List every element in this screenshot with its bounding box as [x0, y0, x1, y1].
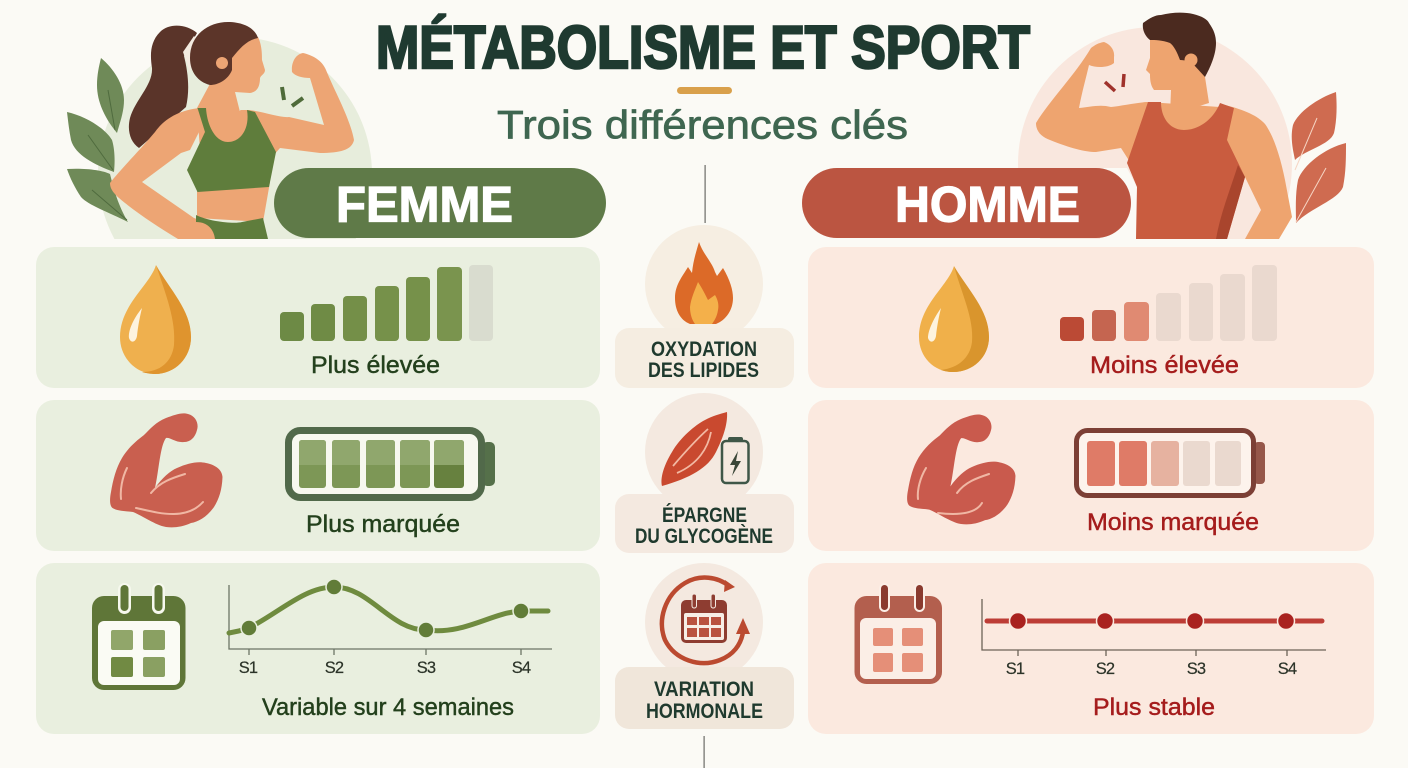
metric: oxydation des lipides: DES LIPIDES — [648, 359, 759, 382]
label: OXYDATION — [651, 338, 757, 361]
label: VARIATION — [654, 678, 754, 701]
man leaves — [1292, 92, 1346, 223]
header: femme: FEMME — [336, 176, 513, 232]
man tank shadow — [1216, 165, 1245, 239]
label: Moins élevée — [1090, 352, 1239, 379]
man ear — [1184, 54, 1198, 66]
subtitle: Trois différences clés — [497, 104, 908, 148]
woman background circle — [98, 39, 372, 239]
metric: epargne du glycogene — [615, 393, 794, 553]
woman hair tie — [183, 36, 196, 71]
woman shorts — [196, 215, 268, 239]
woman arm on hip — [110, 108, 215, 239]
icon: muscle — [110, 413, 222, 527]
header: homme — [802, 168, 1131, 238]
woman chest skin — [198, 111, 247, 144]
line chart: stable: S1 — [1006, 660, 1025, 678]
man hair — [1143, 13, 1216, 77]
title: MÉTABOLISME ET SPORT — [376, 14, 1030, 81]
icon: flame — [675, 242, 733, 324]
metric: variation hormonale — [615, 563, 794, 729]
illustration: woman flexing — [67, 22, 372, 239]
icon: cycle arrows — [662, 578, 750, 663]
bar gauge — [280, 265, 493, 341]
metric: variation hormonale: HORMONALE — [646, 700, 763, 723]
header: femme — [274, 168, 606, 238]
center divider top — [704, 165, 706, 223]
panel: homme hormones — [808, 563, 1374, 734]
line chart: stable: S4 — [1278, 660, 1297, 678]
icon: muscle — [907, 414, 1015, 524]
bar gauge — [1060, 265, 1277, 341]
panel: homme glycogene — [808, 400, 1374, 551]
label: Variable sur 4 semaines — [262, 694, 514, 721]
metric: epargne du glycogene: DU GLYCOGÈNE — [635, 525, 773, 548]
man chest skin — [1161, 102, 1218, 130]
line chart: variable — [229, 579, 552, 677]
line chart: stable: S2 — [1096, 660, 1115, 678]
panel: homme lipides — [808, 247, 1374, 388]
line chart: stable: S3 — [1187, 660, 1206, 678]
man flexed arm — [1036, 42, 1148, 160]
line chart: stable — [982, 599, 1326, 678]
header: homme: HOMME — [895, 176, 1080, 232]
woman midriff — [197, 182, 270, 222]
woman leaves — [67, 58, 128, 222]
line chart: variable: S3 — [417, 659, 436, 677]
panel: femme lipides — [36, 247, 600, 388]
line chart: variable: S2 — [325, 659, 344, 677]
woman flexed arm — [240, 53, 354, 153]
man face and neck — [1146, 40, 1209, 106]
label: Plus stable — [1093, 694, 1215, 721]
woman face and neck — [197, 37, 265, 111]
label: Moins marquée — [1087, 509, 1259, 536]
woman muscle ticks — [282, 87, 303, 106]
label: Plus élevée — [311, 352, 440, 379]
line chart: variable: S4 — [512, 659, 531, 677]
center divider bottom — [704, 736, 705, 768]
metric: oxydation des lipides — [615, 225, 794, 388]
title underline — [677, 87, 732, 94]
man background circle — [1018, 28, 1292, 239]
man muscle ticks — [1105, 74, 1124, 91]
man right arm — [1225, 105, 1292, 239]
icon: battery bolt — [722, 437, 748, 483]
illustration: man flexing — [1018, 12, 1346, 239]
panel: femme hormones — [36, 563, 600, 734]
woman hair — [190, 22, 258, 85]
icon: oil drop — [919, 266, 989, 372]
icon: oil drop — [120, 265, 191, 374]
man tank top — [1127, 102, 1245, 239]
icon: muscle fiber — [661, 412, 727, 486]
label: Plus marquée — [306, 511, 460, 538]
icon: calendar — [92, 583, 186, 690]
battery gauge — [288, 430, 495, 498]
woman ear — [216, 57, 228, 69]
panel: femme glycogene — [36, 400, 600, 551]
woman ponytail — [129, 26, 197, 148]
label: ÉPARGNE — [662, 504, 747, 527]
woman sports top — [187, 108, 276, 192]
man light gap beside pill — [1100, 168, 1137, 239]
battery gauge — [1076, 430, 1265, 496]
line chart: variable: S1 — [239, 659, 258, 677]
icon: calendar — [681, 594, 727, 643]
icon: calendar — [854, 583, 942, 684]
